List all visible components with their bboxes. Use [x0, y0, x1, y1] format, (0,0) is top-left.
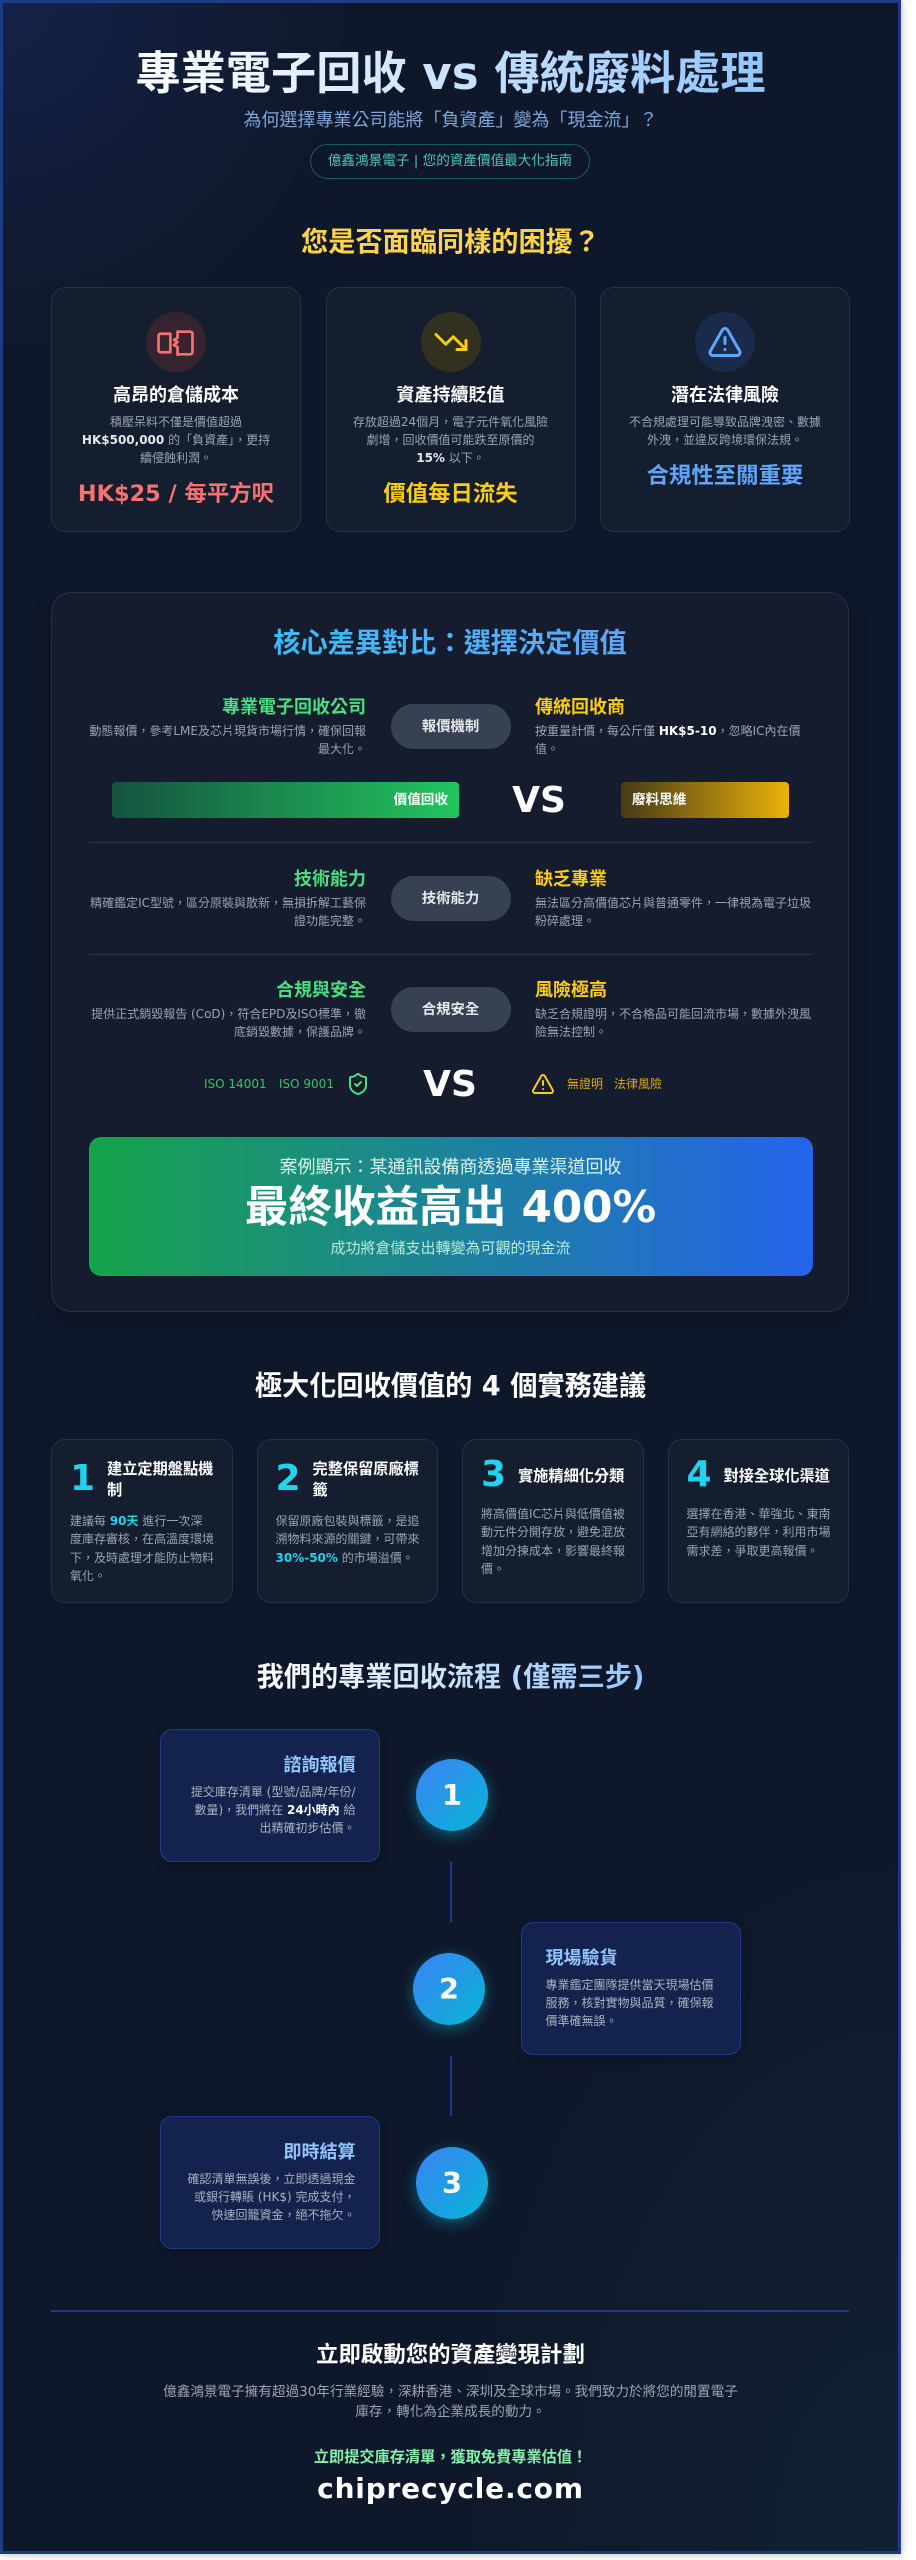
risk notes: 法律風險	[614, 1077, 662, 1091]
tip text: 價。	[481, 1562, 505, 1576]
panel: tip 1	[51, 1439, 232, 1603]
tip heading	[312, 1460, 419, 1498]
card text: 15% 以下。	[416, 451, 485, 465]
tip heading: 籤	[312, 1480, 328, 1498]
panel: depreciation	[326, 287, 576, 532]
step 3 number: 3	[442, 2166, 462, 2200]
tip text: 需求差，爭取更高報價。	[686, 1544, 819, 1558]
step 1 card	[160, 1729, 380, 1862]
professional text	[90, 896, 366, 928]
card text: 不合規處理可能導致品牌洩密、數據	[629, 415, 821, 429]
card text	[353, 415, 548, 465]
tip text: 30%-50% 的市場溢價。	[276, 1551, 414, 1565]
tip heading: 完整保留原廠標	[312, 1460, 419, 1478]
step text: 或銀行轉賬 (HK$) 完成支付，	[194, 2190, 356, 2204]
title: 專業電子回收 vs 傳統廢料處理	[135, 47, 766, 100]
row: pricing mechanism	[89, 697, 800, 756]
tip heading: 對接全球化渠道	[724, 1466, 830, 1484]
tip text: 氧化。	[70, 1569, 106, 1583]
professional text: 最大化。	[318, 742, 366, 756]
card text: 外洩，並違反跨境環保法規。	[647, 433, 803, 447]
card text	[629, 415, 821, 447]
tip heading: 制	[107, 1480, 122, 1498]
traditional heading: 風險極高	[535, 980, 607, 1001]
row label	[390, 704, 510, 749]
footer text	[163, 2384, 738, 2420]
tip number: 3	[481, 1454, 506, 1495]
step text: 數量)，我們將在 24小時內 給	[194, 1803, 356, 1817]
step 3 card	[160, 2116, 380, 2249]
tip text: 動元件分開存放，避免混放	[481, 1525, 625, 1539]
traditional text: 缺乏合規證明，不合格品可能回流市場，數據外洩風	[535, 1007, 811, 1021]
step text: 服務，核對實物與品質，確保報	[546, 1996, 714, 2010]
step text: 出精確初步估價。	[259, 1821, 356, 1835]
tag pill: 億鑫鴻景電子 | 您的資產價值最大化指南	[328, 153, 572, 169]
step text: 提交庫存清單 (型號/品牌/年份/	[191, 1785, 356, 1799]
card text: 存放超過24個月，電子元件氧化風險	[353, 415, 548, 429]
certifications	[204, 1072, 367, 1095]
tip text: 建議每 90天 進行一次深	[70, 1514, 202, 1528]
professional heading: 合規與安全	[276, 980, 366, 1001]
traditional text: 值。	[535, 742, 559, 756]
tip text: 下，及時處理才能防止物料	[70, 1551, 214, 1565]
professional text: 動態報價，參考LME及芯片現貨市場行情，確保回報	[89, 724, 366, 738]
VS label: VS	[423, 1064, 477, 1105]
professional text	[91, 1007, 366, 1039]
heading: process: 我們的專業回收流程 (僅需三步)	[257, 1662, 644, 1693]
traditional text: 按重量計價，每公斤僅 HK$5-10，忽略IC內在價	[535, 724, 800, 738]
tip heading: 建立定期盤點機	[107, 1460, 213, 1478]
step 2 number	[413, 1953, 485, 2025]
tip number: 2	[276, 1458, 301, 1499]
tip text	[276, 1514, 420, 1565]
step text: 專業鑑定團隊提供當天現場估價	[546, 1978, 714, 1992]
step text	[191, 1785, 356, 1835]
panel: tip 4	[668, 1439, 849, 1603]
card text: 續侵蝕利潤。	[140, 451, 212, 465]
tip text: 亞有網絡的夥伴，利用市場	[686, 1525, 831, 1539]
bar: value recovery: 價值回收	[394, 792, 448, 808]
card heading: 潛在法律風險	[671, 385, 779, 406]
tip text: 選擇在香港、華強北、東南	[686, 1507, 831, 1521]
icon: storage cost	[146, 312, 206, 372]
panel: legal risk	[600, 287, 850, 532]
professional text: 提供正式銷毀報告 (CoD)，符合EPD及ISO標準，徹	[91, 1007, 366, 1021]
row label: 技術能力	[422, 891, 479, 907]
traditional heading: 傳統回收商	[535, 697, 625, 718]
step text	[546, 1978, 714, 2028]
risk notes: 無證明	[567, 1077, 603, 1091]
tip text	[70, 1514, 214, 1583]
row label	[390, 987, 510, 1032]
icon: trending down	[420, 312, 480, 372]
case figure: 最終收益高出 400%	[245, 1183, 656, 1233]
professional heading: 專業電子回收公司	[222, 697, 366, 718]
step 1 number: 1	[442, 1778, 462, 1812]
row label	[390, 876, 510, 921]
bar: scrap mindset	[621, 782, 789, 818]
panel: core comparison	[51, 592, 849, 1312]
callout: case study	[88, 1137, 813, 1276]
comparison heading: 核心差異對比：選擇決定價值	[273, 628, 627, 659]
tip text	[481, 1507, 625, 1576]
step text: 確認清單無誤後，立即透過現金	[187, 2172, 356, 2186]
step 2 number: 2	[439, 1972, 459, 2006]
traditional text: 粉碎處理。	[535, 914, 595, 928]
connector 2	[450, 2056, 452, 2116]
card text: HK$500,000 的「負資產」，更持	[82, 433, 270, 447]
tip text: 度庫存審核，在高溫度環境	[70, 1532, 214, 1546]
card heading: 高昂的倉儲成本	[113, 385, 239, 406]
professional text: 精確鑑定IC型號，區分原裝與散新，無損拆解工藝保	[90, 896, 366, 910]
bar: scrap mindset: 廢料思維	[632, 792, 686, 808]
card statistic: 合規性至關重要	[647, 463, 803, 489]
traditional text	[535, 724, 800, 756]
icon: warning	[695, 312, 755, 372]
panel: storage cost	[51, 287, 301, 532]
footer heading: 立即啟動您的資產變現計劃	[316, 2342, 585, 2368]
professional text	[89, 724, 366, 756]
card text: 積壓呆料不僅是價值超過	[110, 415, 242, 429]
card heading: 資產持續貶值	[396, 385, 504, 406]
professional heading: 技術能力	[294, 869, 366, 890]
footer text: 庫存，轉化為企業成長的動力。	[355, 2404, 546, 2420]
row: technical capability	[90, 869, 811, 928]
step text	[187, 2172, 356, 2222]
tip heading	[107, 1460, 213, 1498]
step text: 價準確無誤。	[546, 2014, 618, 2028]
tip number: 4	[686, 1454, 712, 1495]
row: compliance	[91, 980, 811, 1039]
bar: value recovery	[112, 782, 459, 818]
step heading: 即時結算	[284, 2142, 356, 2163]
risk notes	[532, 1074, 662, 1094]
heading: tips: 極大化回收價值的 4 個實務建議	[255, 1371, 646, 1402]
traditional heading: 缺乏專業	[535, 869, 607, 890]
call to action: 立即提交庫存清單，獲取免費專業估值！	[314, 2448, 587, 2466]
footer text: 億鑫鴻景電子擁有超過30年行業經驗，深耕香港、深圳及全球市場。我們致力於將您的閒置電子	[163, 2384, 738, 2400]
card text: 劇增，回收價值可能跌至原價的	[366, 433, 534, 447]
tip text: 將高價值IC芯片與低價值被	[481, 1507, 625, 1521]
step heading: 諮詢報價	[284, 1755, 356, 1776]
tip text: 增加分揀成本，影響最終報	[481, 1544, 625, 1558]
traditional text	[535, 1007, 811, 1039]
website: chiprecycle.com	[317, 2472, 584, 2505]
tag pill	[310, 144, 590, 179]
panel: tip 3	[462, 1439, 644, 1603]
traditional text	[535, 896, 811, 928]
case text: 案例顯示：某通訊設備商透過專業渠道回收	[280, 1157, 622, 1178]
heading: pain points: 您是否面臨同樣的困擾？	[301, 227, 600, 258]
step 1 number	[416, 1759, 488, 1831]
tip heading: 實施精細化分類	[518, 1466, 624, 1484]
card text	[82, 415, 270, 465]
connector 1	[450, 1862, 452, 1922]
traditional text: 險無法控制。	[535, 1025, 607, 1039]
step 3 number	[416, 2147, 488, 2219]
subtitle: 為何選擇專業公司能將「負資產」變為「現金流」？	[244, 110, 658, 131]
professional text: 證功能完整。	[294, 914, 366, 928]
VS label: VS	[512, 780, 566, 821]
tip number: 1	[70, 1458, 95, 1499]
card statistic: 價值每日流失	[383, 481, 518, 507]
professional text: 底銷毀數據，保護品牌。	[234, 1025, 366, 1039]
traditional text: 無法區分高價值芯片與普通零件，一律視為電子垃圾	[535, 896, 811, 910]
card statistic: HK$25 / 每平方呎	[78, 481, 274, 507]
tip text: 保留原廠包裝與標籤，是追	[276, 1514, 420, 1528]
case note: 成功將倉儲支出轉變為可觀的現金流	[330, 1239, 570, 1257]
tip text	[686, 1507, 831, 1558]
panel: tip 2	[256, 1439, 438, 1603]
step heading: 現場驗貨	[546, 1948, 618, 1969]
row label: 報價機制	[422, 719, 479, 735]
step text: 快速回籠資金，絕不拖欠。	[211, 2208, 356, 2222]
step 2 card	[521, 1922, 741, 2055]
tip text: 溯物料來源的關鍵，可帶來	[276, 1532, 420, 1546]
certifications: ISO 14001	[204, 1077, 267, 1091]
certifications: ISO 9001	[279, 1077, 334, 1091]
row label: 合規安全	[422, 1002, 479, 1018]
